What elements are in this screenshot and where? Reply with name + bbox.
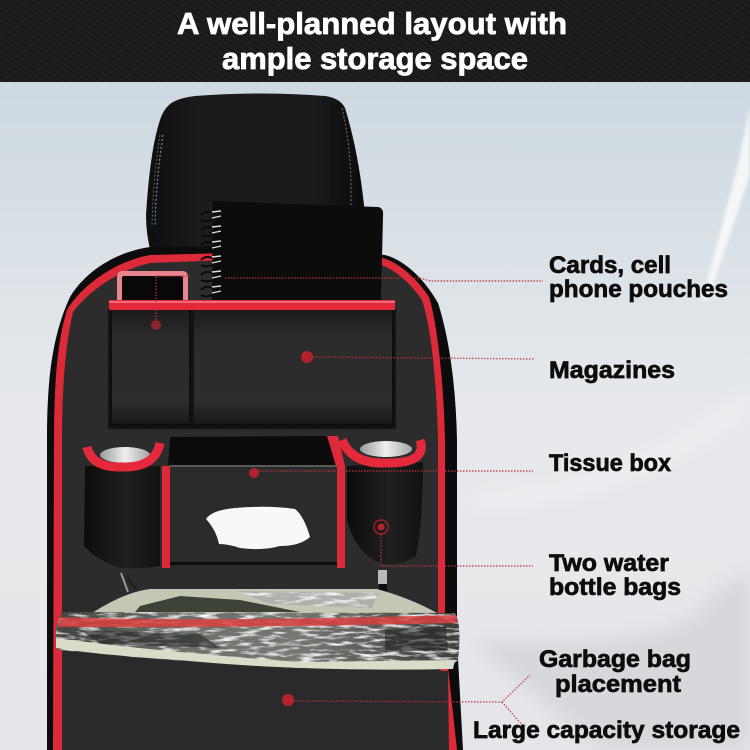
- headrest: [146, 94, 364, 262]
- garbage bag: [56, 589, 459, 670]
- label: cards, cell phone pouches: phone pouches: [549, 276, 728, 303]
- label: large capacity storage: Large capacity storage: [473, 717, 740, 744]
- tissue box pouch: [162, 436, 345, 568]
- marker: garbage bag and large capacity: [282, 675, 530, 726]
- label: two water bottle bags: bottle bags: [549, 574, 681, 601]
- label: garbage bag placement: [539, 646, 691, 698]
- top pockets: [108, 300, 396, 429]
- label: tissue box: Tissue box: [549, 450, 672, 477]
- label: two water bottle bags: Two water: [549, 550, 669, 577]
- title: ample storage space: [222, 41, 528, 76]
- left bottle bag: [84, 443, 160, 568]
- spiral notebook: [201, 201, 383, 301]
- marker: magazines: [301, 351, 535, 363]
- label: cards, cell phone pouches: [549, 252, 728, 303]
- label: garbage bag placement: Garbage bag: [539, 646, 691, 673]
- lower storage panel: [63, 651, 449, 750]
- seat back shell: [47, 246, 463, 750]
- title: A well-planned layout with: [177, 6, 567, 41]
- marker: water bottle bags: [374, 520, 533, 566]
- marker: cards and phone: [151, 276, 543, 330]
- clips: [121, 570, 387, 602]
- label: cards, cell phone pouches: Cards, cell: [549, 252, 671, 279]
- title: [177, 6, 567, 76]
- tissue: [206, 507, 310, 549]
- label: garbage bag placement: placement: [555, 671, 681, 698]
- pocket: magazines: [194, 310, 392, 423]
- phone: [117, 271, 188, 305]
- pocket: cards and phone: [112, 310, 189, 423]
- marker: tissue box: [249, 468, 533, 478]
- car seat with organizer: [47, 94, 463, 750]
- label: magazines: Magazines: [549, 357, 675, 384]
- header band: [0, 0, 750, 82]
- label: two water bottle bags: [549, 550, 681, 601]
- right bottle bag: [327, 436, 423, 564]
